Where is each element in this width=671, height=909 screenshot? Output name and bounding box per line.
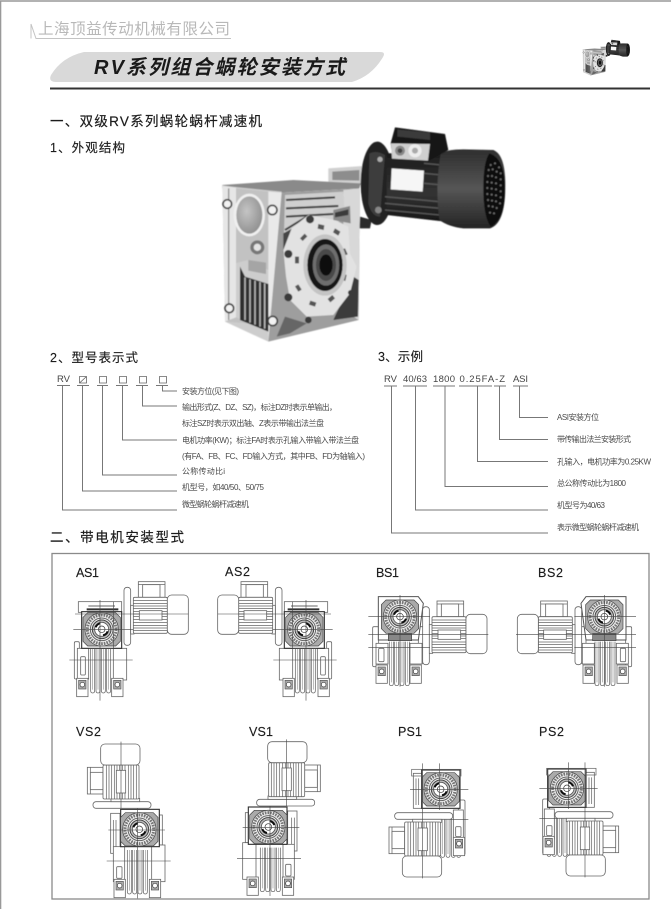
example descriptions: 总公称传动比为1800 <box>557 478 627 488</box>
label BS2: BS2 <box>538 566 563 580</box>
label BS1: BS1 <box>376 566 399 580</box>
notation descriptions: 电机功率(KW)；标注FA时表示孔输入带输入带法兰盘 <box>182 435 359 445</box>
diagram AS1 <box>69 582 188 701</box>
example code <box>384 374 528 386</box>
model code boxes <box>57 374 168 386</box>
example code: 40/63 <box>403 374 427 385</box>
notation descriptions <box>182 386 365 509</box>
example code: ASI <box>513 374 528 385</box>
panel: mounting types <box>52 554 649 899</box>
heading: appearance: 1、外观结构 <box>50 140 125 155</box>
example descriptions: ASI安装方位 <box>557 412 599 422</box>
label VS2: VS2 <box>76 725 101 739</box>
photo: reducer with motor <box>222 127 505 342</box>
notation descriptions: 公称传动比i <box>182 466 225 476</box>
example descriptions: 表示微型蜗轮蜗杆减速机 <box>557 522 639 532</box>
example code: RV <box>384 374 398 385</box>
label AS1: AS1 <box>76 566 99 580</box>
heading: motor mounting types: 二、带电机安装型式 <box>50 530 184 545</box>
heading: model notation: 2、型号表示式 <box>50 351 138 365</box>
example descriptions: 带传输出法兰安装形式 <box>557 434 631 444</box>
example descriptions: 孔输入，电机功率为0.25KW <box>557 456 651 466</box>
label PS1: PS1 <box>398 725 422 739</box>
diagram: model notation <box>57 374 365 510</box>
label PS2: PS2 <box>539 725 564 739</box>
notation descriptions: 安装方位(见下图) <box>182 386 239 396</box>
diagram PS1 <box>389 763 468 878</box>
diagram: example <box>384 374 651 533</box>
leader lines <box>392 386 548 533</box>
diagram VS1 <box>237 739 320 896</box>
title rule <box>50 88 650 90</box>
notation descriptions: (有FA、FB、FC、FD输入方式，其中FB、FD为轴输入) <box>182 451 365 461</box>
diagram BS2 <box>516 595 636 687</box>
notation descriptions: 微型蜗轮蜗杆减速机 <box>182 499 249 509</box>
label AS2: AS2 <box>225 565 250 579</box>
diagram PS2 <box>539 762 619 877</box>
example descriptions: 机型号为40/63 <box>557 500 606 510</box>
heading: example: 3、示例 <box>378 350 423 364</box>
notation descriptions: 标注SZ时表示双出轴、Z表示带输出法兰盘 <box>182 418 324 428</box>
diagram BS1 <box>368 595 488 687</box>
icon: small reducer thumbnail <box>583 40 630 75</box>
diagram AS2 <box>218 582 337 701</box>
company name: 上海顶益传动机械有限公司 <box>38 20 230 38</box>
label VS1: VS1 <box>249 725 273 739</box>
example descriptions <box>557 412 651 532</box>
title banner <box>50 52 384 82</box>
heading: section one: 一、双级RV系列蜗轮蜗杆减速机 <box>50 114 262 129</box>
diagram VS2 <box>87 742 171 898</box>
title banner: RV系列组合蜗轮安装方式 <box>94 56 348 79</box>
model code boxes: RV <box>57 374 71 385</box>
notation descriptions: 机型号，如40/50、50/75 <box>182 482 265 492</box>
leader lines <box>62 386 177 510</box>
example code: 0.25FA-Z <box>460 374 505 385</box>
notation descriptions: 输出形式(Z、DZ、SZ)，标注DZ时表示单输出， <box>182 402 337 412</box>
example code: 1800 <box>433 374 455 385</box>
